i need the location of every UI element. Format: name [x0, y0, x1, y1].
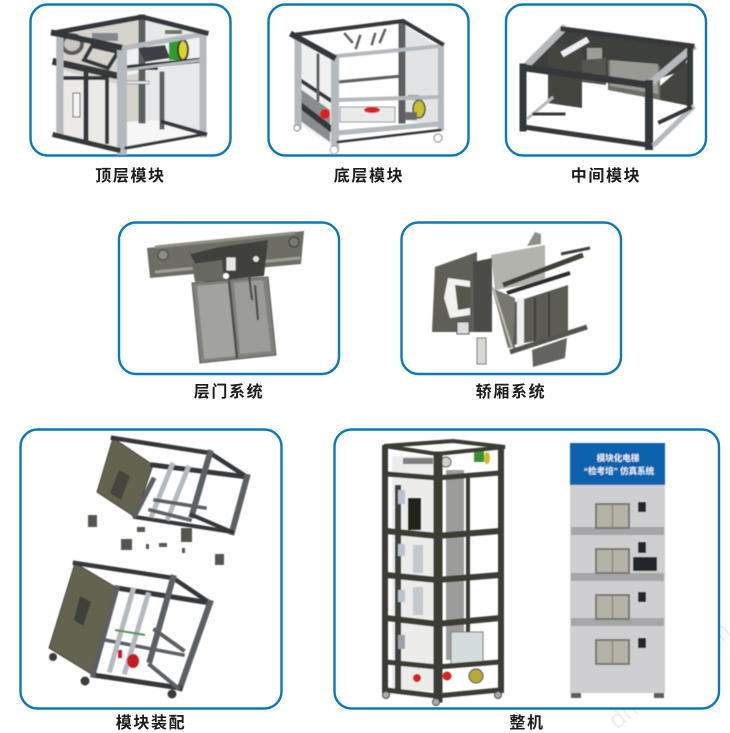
label: bottom module: 底层模块 — [334, 166, 404, 185]
panel: landing door system — [119, 222, 339, 374]
panel: module assembly — [20, 430, 282, 708]
panel: car system — [402, 222, 621, 374]
label: module assembly: 模块装配 — [116, 714, 186, 732]
label: top module: 顶层模块 — [95, 167, 166, 185]
illustration: control cabinet — [570, 443, 665, 698]
illustration: middle module frame — [523, 29, 692, 146]
cabinet header banner — [570, 443, 665, 485]
illustration: elevator frame tower — [382, 441, 505, 706]
label: middle module: 中间模块 — [571, 167, 641, 185]
panel: bottom module — [268, 4, 468, 156]
illustration: bottom module frame — [293, 21, 442, 154]
cabinet header banner: “检考培” 仿真系统 — [584, 466, 655, 476]
illustration: small parts — [88, 515, 224, 565]
panel: complete machine — [334, 430, 719, 708]
illustration: car — [432, 232, 590, 367]
illustration: landing door — [147, 231, 304, 363]
panel: middle module — [506, 4, 706, 156]
illustration: exploded upper module — [97, 438, 247, 532]
panel: top module — [30, 4, 230, 156]
label: complete machine: 整机 — [509, 714, 545, 732]
label: car system: 轿厢系统 — [476, 382, 546, 401]
illustration: assembled lower module — [49, 563, 210, 698]
cabinet header banner: 模块化电梯 — [597, 453, 640, 463]
label: landing door system: 层门系统 — [194, 382, 264, 401]
illustration: top module frame — [54, 17, 206, 150]
